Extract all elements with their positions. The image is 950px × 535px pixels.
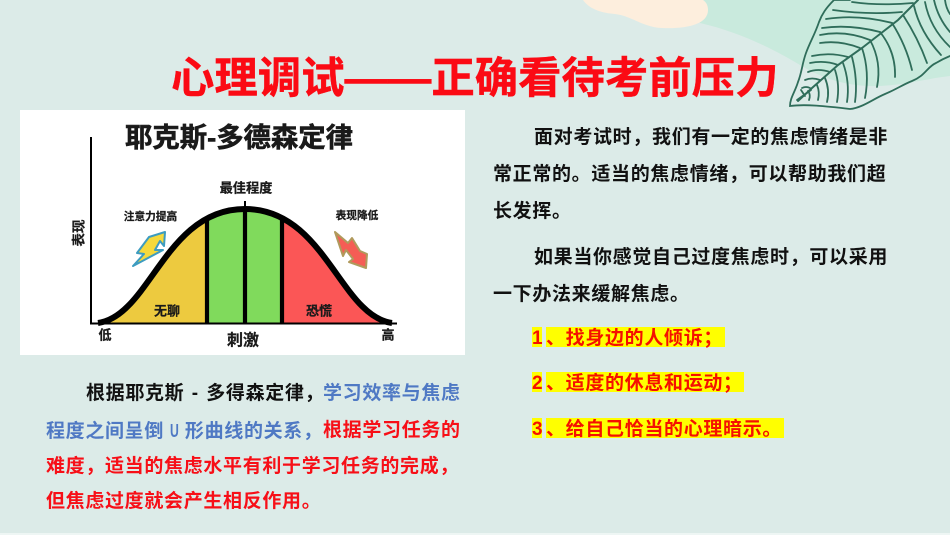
list: coping methods: 2 <box>532 373 543 394</box>
band label: boredom: 无聊 <box>154 304 180 318</box>
text block: Yerkes-Dodson explanation: 难度，适当的焦虑水平有利于学习任务的完成， <box>46 456 459 477</box>
low label: 低 <box>98 328 112 342</box>
text block: coping intro: 如果当你感觉自己过度焦虑时，可以采用 <box>534 247 888 268</box>
chart title: 耶克斯-多德森定律 <box>125 123 353 153</box>
text block: anxiety is normal: 面对考试时，我们有一定的焦虑情绪是非 <box>534 127 888 148</box>
text block: Yerkes-Dodson explanation: 学习效率与焦虑 <box>323 383 461 404</box>
band label: panic: 恐慌 <box>306 304 332 318</box>
y axis label: 表现 <box>70 219 86 246</box>
text block: Yerkes-Dodson explanation: 根据学习任务的 <box>323 420 461 441</box>
text block: Yerkes-Dodson explanation <box>46 382 461 512</box>
title: 心理调试——正确看待考前压力 <box>171 55 778 103</box>
bell curve bands <box>110 212 380 322</box>
text block: Yerkes-Dodson explanation: 但焦虑过度就会产生相反作用。 <box>46 491 321 512</box>
x axis label: 刺激 <box>227 332 259 350</box>
peak label: 最佳程度 <box>220 180 272 196</box>
axes <box>91 137 397 324</box>
list: coping methods: 3 <box>532 419 543 440</box>
list: coping methods: 1 <box>532 328 543 349</box>
text block: coping intro <box>493 246 888 305</box>
panel: Yerkes-Dodson chart <box>20 110 465 355</box>
text block: anxiety is normal: 常正常的。适当的焦虑情绪，可以帮助我们超 <box>493 164 886 185</box>
text block: anxiety is normal: 长发挥。 <box>493 201 572 222</box>
rising label: 注意力提高 <box>124 210 178 223</box>
text block: Yerkes-Dodson explanation: 根据耶克斯 - 多得森定律， <box>86 383 324 404</box>
icon: leaf decoration <box>789 0 950 110</box>
bell curve outline <box>98 209 392 323</box>
list: coping methods: 、找身边的人倾诉； <box>546 328 723 349</box>
text block: Yerkes-Dodson explanation: U <box>170 421 179 441</box>
falling label: 表现降低 <box>336 209 379 222</box>
icon: falling lightning <box>335 232 367 268</box>
list: coping methods: 、适度的休息和运动； <box>546 373 743 394</box>
text block: anxiety is normal <box>493 126 888 222</box>
list: coping methods <box>532 327 784 440</box>
high label: 高 <box>381 328 395 342</box>
icon: rising lightning <box>133 232 165 266</box>
text block: Yerkes-Dodson explanation: 程度之间呈倒 形曲线的关系， <box>46 421 323 442</box>
text block: coping intro: 一下办法来缓解焦虑。 <box>493 284 690 305</box>
list: coping methods: 、给自己恰当的心理暗示。 <box>546 419 782 440</box>
